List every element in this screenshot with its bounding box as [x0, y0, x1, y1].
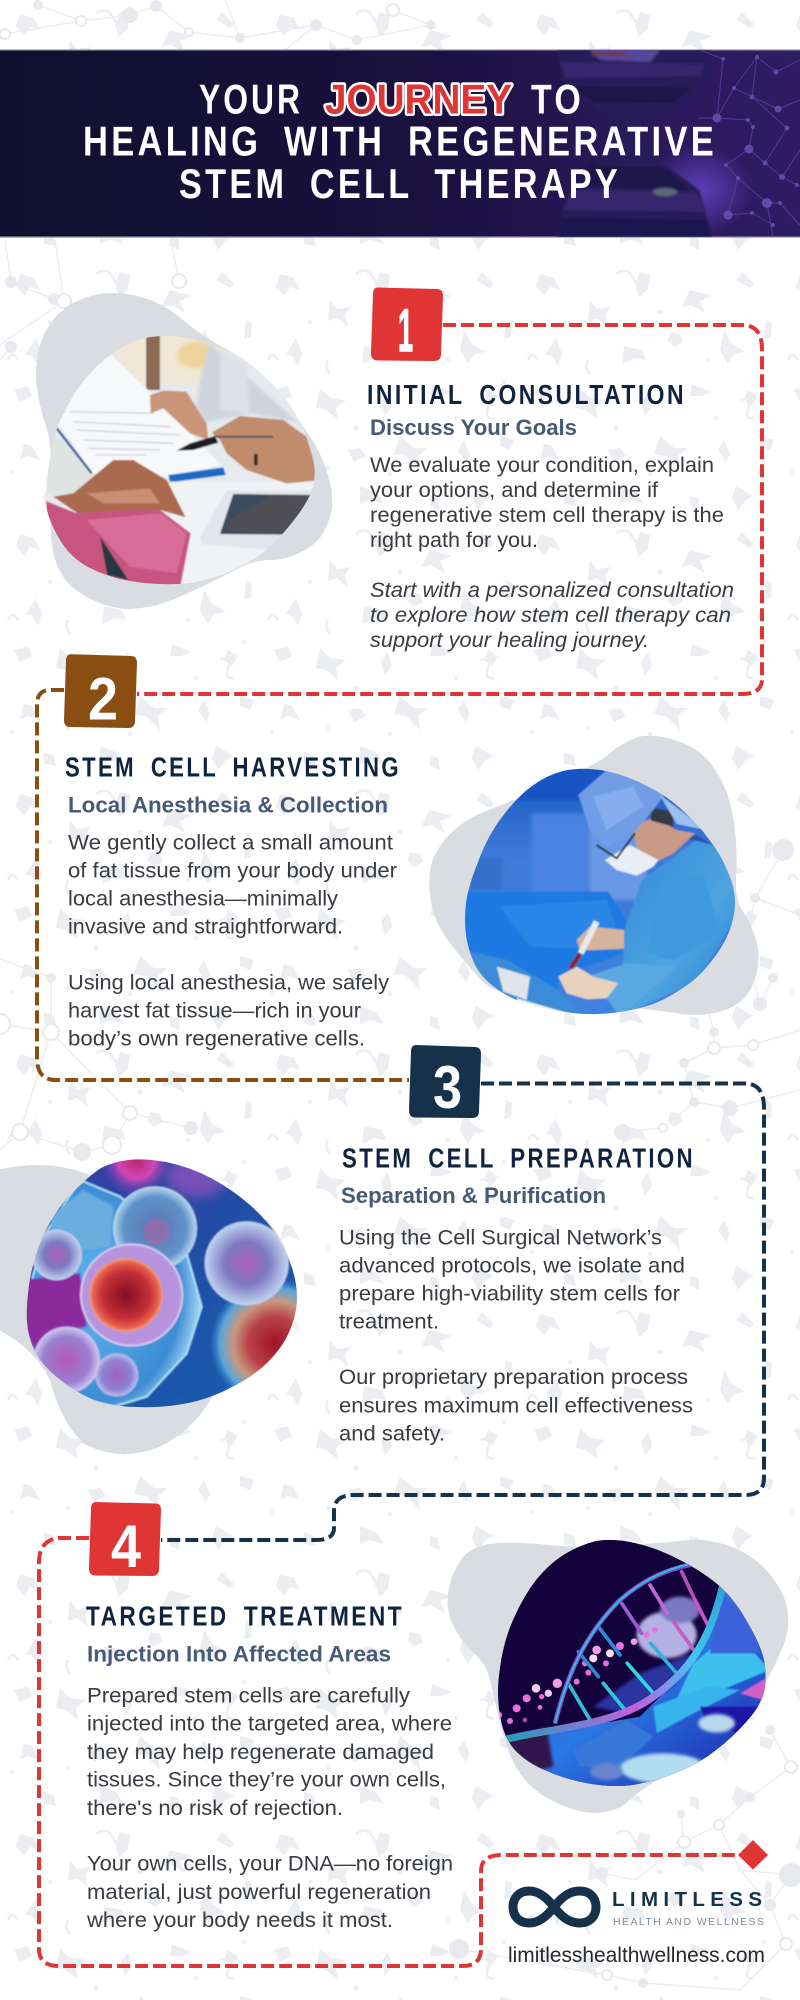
connector: step 1 red dashed path [137, 325, 762, 694]
secondary text: ensures maximum cell effectiveness [339, 1393, 693, 1417]
panel: step 1 initial consultation [36, 288, 734, 652]
body text [87, 1684, 452, 1820]
body text: your options, and determine if [370, 478, 658, 502]
paper [58, 353, 222, 477]
panel: step 2 stem cell harvesting [64, 654, 759, 1050]
secondary text: material, just powerful regeneration [87, 1880, 431, 1904]
drape [465, 891, 626, 989]
body text [68, 830, 397, 939]
body text: local anesthesia—minimally [68, 886, 338, 910]
logo wordmark: LIMITLESS [612, 1888, 762, 1911]
italic text: to explore how stem cell therapy can [370, 603, 731, 627]
DNA strands [503, 1583, 723, 1740]
panel: step 3 stem cell preparation [0, 1045, 695, 1454]
DNA rungs [568, 1572, 708, 1720]
banner DNA helix [556, 50, 750, 237]
title: TO [531, 76, 584, 122]
step badge 4: 4 [111, 1513, 142, 1580]
secondary text [86, 1852, 453, 1932]
logo tagline: HEALTH AND WELLNESS [613, 1916, 764, 1928]
connector: step 3 navy dashed path [161, 1084, 764, 1540]
heading: INITIAL CONSULTATION [367, 379, 686, 410]
large nucleus body [27, 1180, 202, 1407]
body text: tissues. Since they’re your own cells, [87, 1768, 446, 1792]
secondary text [68, 970, 389, 1050]
body text: Prepared stem cells are carefully [87, 1684, 410, 1708]
molecule network: upper left [0, 240, 186, 360]
body text: right path for you. [370, 528, 538, 552]
molecule network: right middle [614, 839, 800, 1140]
body text: regenerative stem cell therapy is the [370, 503, 724, 527]
photo blob: surgeon [429, 736, 759, 1020]
body text: invasive and straightforward. [68, 915, 343, 939]
secondary text: Using local anesthesia, we safely [68, 970, 389, 994]
banner network lines [698, 50, 800, 237]
body text: of fat tissue from your body under [68, 858, 397, 882]
secondary text: Our proprietary preparation process [339, 1365, 688, 1389]
header banner [0, 30, 800, 237]
step badge 1: 1 [398, 297, 413, 364]
secondary text: body’s own regenerative cells. [68, 1026, 365, 1050]
italic text [370, 578, 734, 652]
title: YOUR [199, 76, 303, 122]
heading: STEM CELL PREPARATION [342, 1143, 695, 1174]
connector: step 4 red dashed path [39, 1538, 740, 1966]
subheading: Injection Into Affected Areas [87, 1641, 391, 1666]
molecule network: left middle [0, 959, 198, 1161]
body text [339, 1226, 685, 1334]
step badge 3 [409, 1045, 481, 1121]
body text: prepare high-viability stem cells for [339, 1282, 680, 1306]
icon: end-of-path diamond [738, 1840, 768, 1870]
subheading: Discuss Your Goals [370, 415, 577, 440]
panel: step 4 targeted treatment [86, 1502, 788, 1932]
step badge 2: 2 [88, 665, 118, 732]
logo: Limitless Health and Wellness [513, 1888, 764, 1928]
icon: infinity symbol [513, 1891, 596, 1923]
body text: advanced protocols, we isolate and [339, 1254, 685, 1278]
molecule network: top [0, 0, 436, 50]
head [633, 817, 695, 862]
secondary text: where your body needs it most. [86, 1908, 393, 1932]
highlighted word: JOURNEY: JOURNEY [325, 76, 512, 122]
title: STEM CELL THERAPY [179, 160, 621, 207]
table and tablet [170, 482, 320, 588]
italic text: support your healing journey. [370, 628, 649, 652]
body text: treatment. [339, 1310, 439, 1334]
step badge 1 [371, 288, 443, 364]
pink bokeh dots [496, 1627, 658, 1724]
website url: limitlesshealthwellness.com [508, 1943, 765, 1967]
lower blue mesh [508, 1588, 766, 1786]
connector: step 2 brown dashed path [37, 690, 409, 1080]
heading: STEM CELL HARVESTING [65, 752, 401, 783]
secondary text: harvest fat tissue—rich in your [68, 998, 361, 1022]
photo blob: DNA [448, 1533, 788, 1813]
secondary text: and safety. [339, 1422, 445, 1446]
subheading: Local Anesthesia & Collection [68, 793, 388, 818]
subheading: Separation & Purification [341, 1183, 606, 1208]
heading: TARGETED TREATMENT [86, 1601, 404, 1632]
molecule network: bottom right [449, 1725, 800, 1990]
step badge 4 [89, 1502, 161, 1580]
body text: Using the Cell Surgical Network’s [339, 1226, 662, 1250]
photo blob: cells [0, 1159, 297, 1454]
step badge 2 [64, 654, 137, 732]
gown [607, 840, 737, 1017]
body text: they may help regenerate damaged [87, 1740, 434, 1764]
hands [150, 391, 208, 440]
secondary text: Your own cells, your DNA—no foreign [87, 1852, 453, 1876]
photo blob: consultation [36, 293, 332, 609]
body text: there's no risk of rejection. [87, 1796, 343, 1820]
pink sleeve [43, 500, 191, 588]
body text [370, 453, 724, 552]
hands and syringe [577, 927, 624, 951]
step badge 3: 3 [433, 1054, 462, 1121]
body text: injected into the targeted area, where [87, 1712, 452, 1736]
title [83, 76, 717, 207]
body text: We evaluate your condition, explain [370, 453, 714, 477]
body text: We gently collect a small amount [68, 830, 393, 854]
secondary text [339, 1365, 693, 1446]
italic text: Start with a personalized consultation [370, 578, 734, 602]
